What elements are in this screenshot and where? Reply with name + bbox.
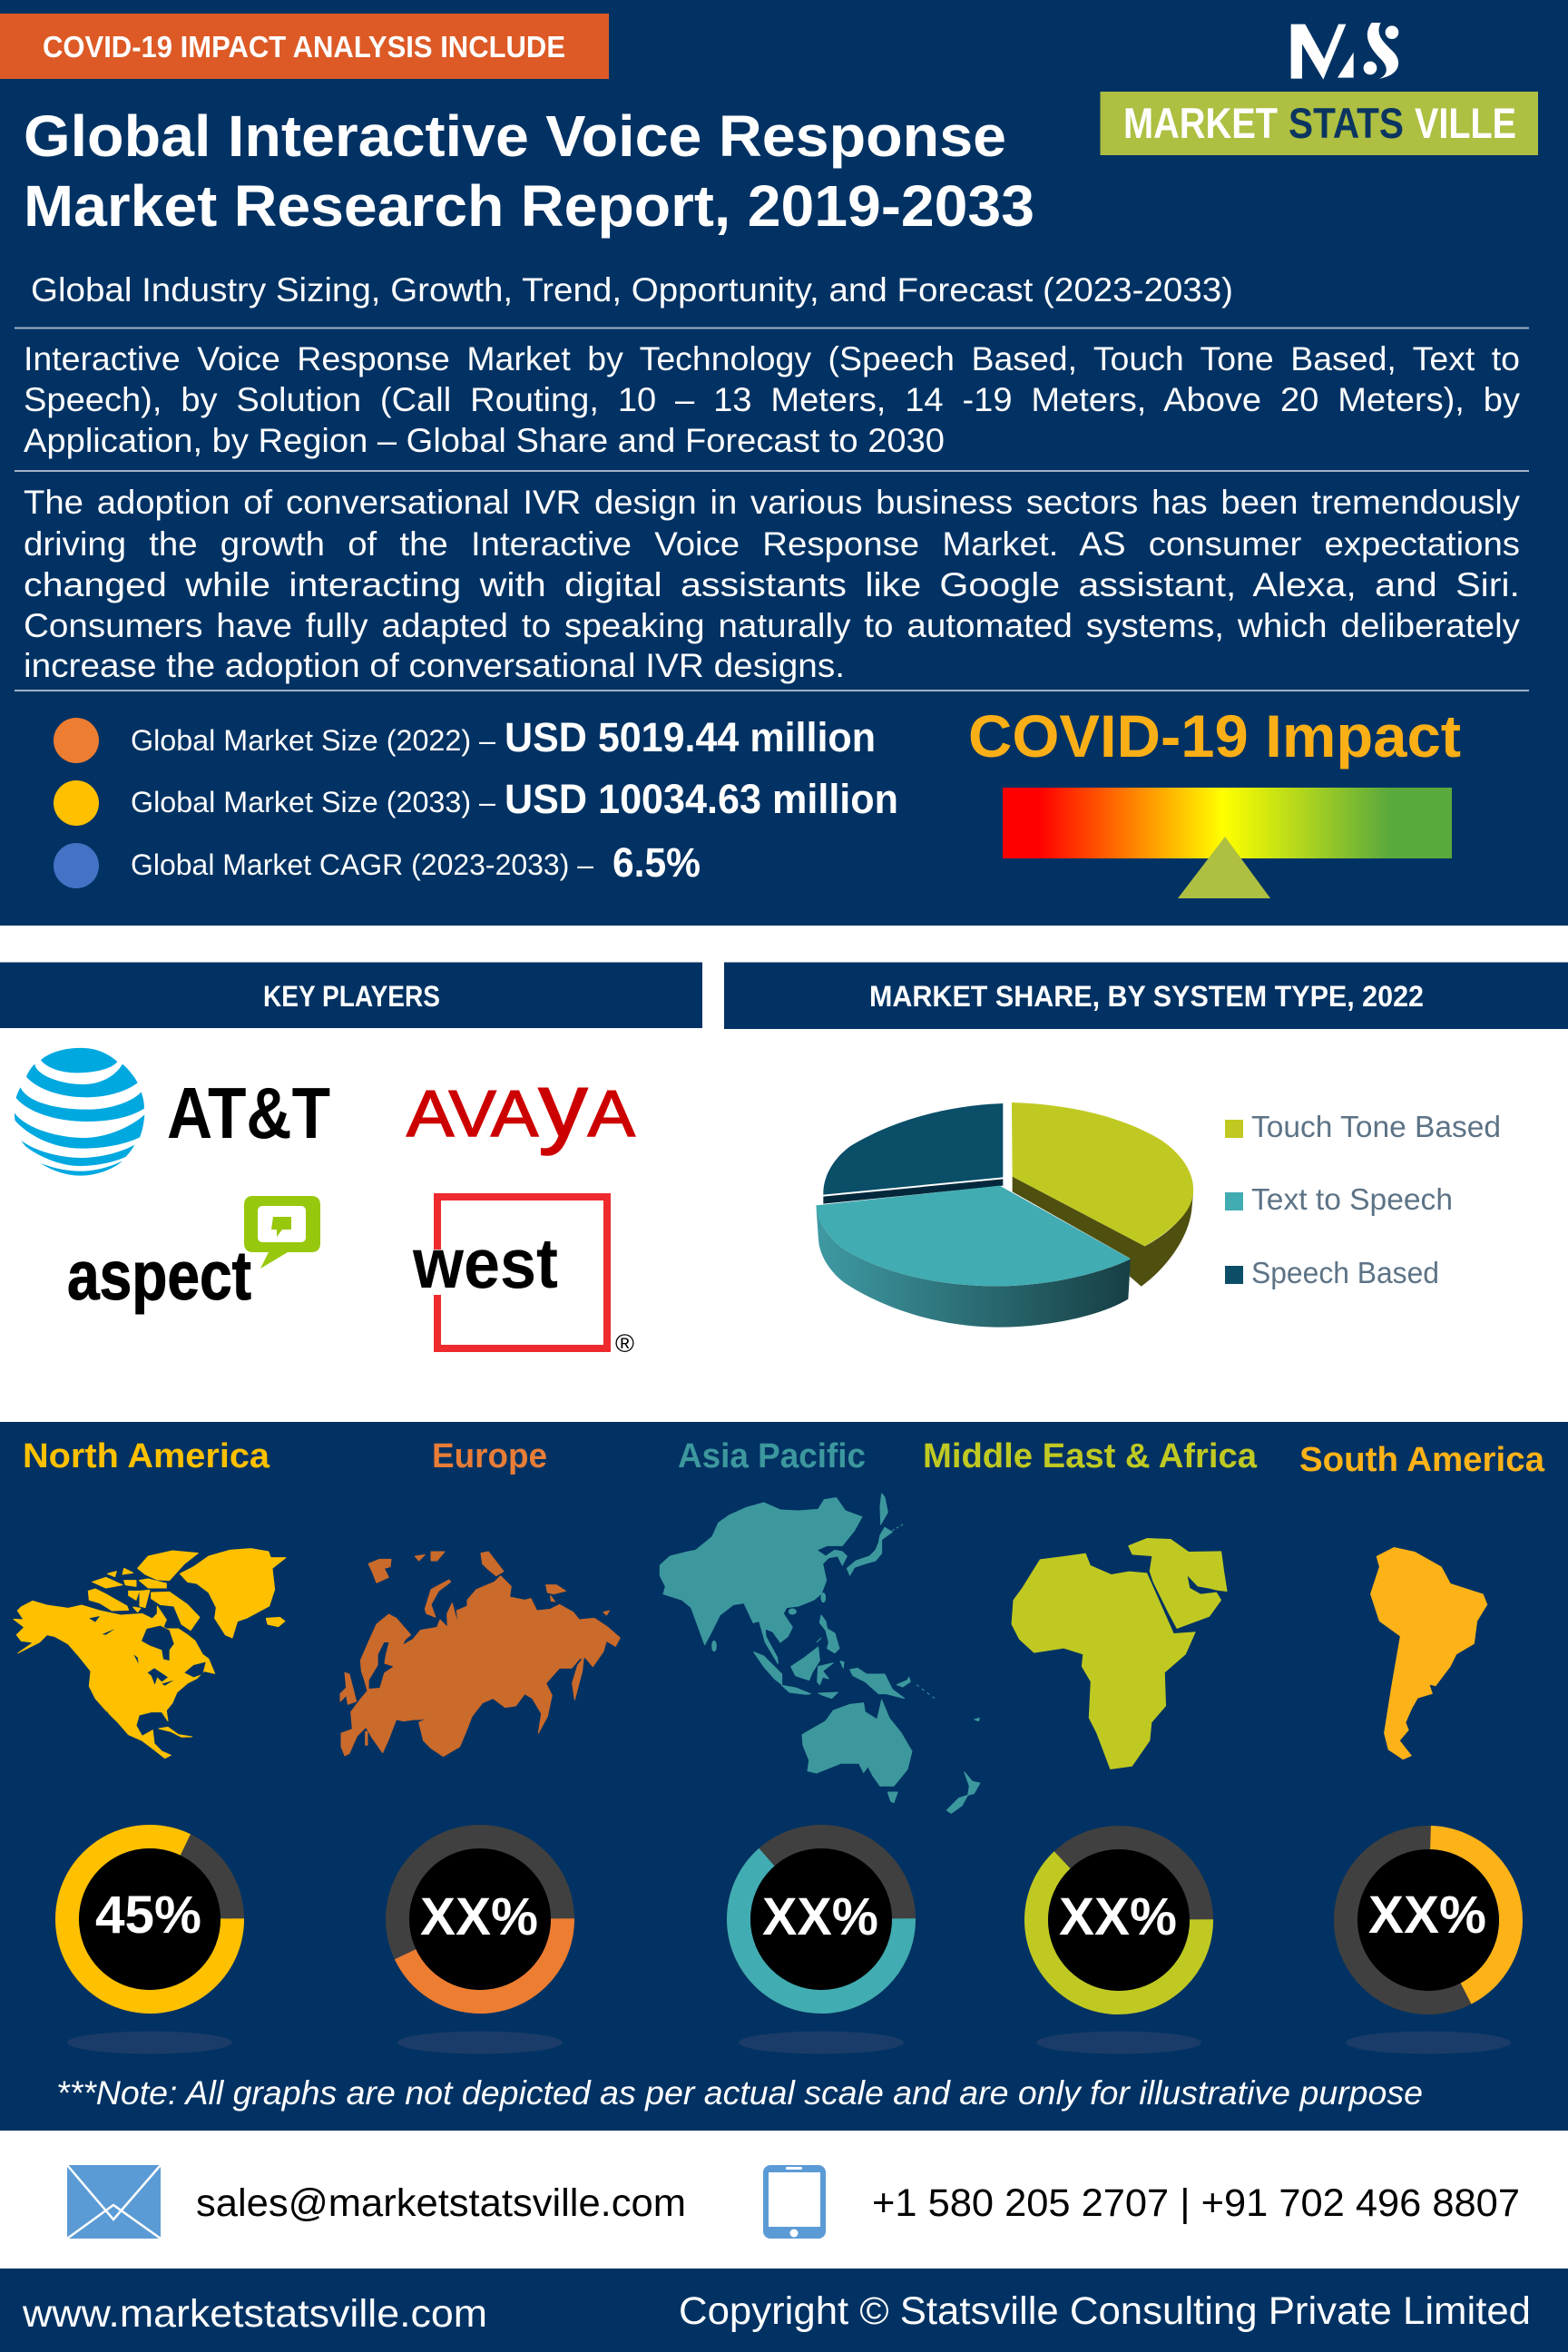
donut: europe bbox=[397, 1837, 563, 2054]
logo: market stats ville: MARKET bbox=[1123, 99, 1278, 147]
heading: covid-19 impact: COVID-19 Impact bbox=[968, 702, 1461, 769]
logo: aspect bbox=[67, 1196, 320, 1315]
panel: contact bbox=[67, 2165, 1520, 2239]
donut: north america 45%: 45% bbox=[95, 1886, 201, 1945]
phone numbers: +1 580 205 2707 | +91 702 496 8807 bbox=[872, 2181, 1520, 2225]
map: north america bbox=[14, 1549, 286, 1759]
logo: market stats ville bbox=[1100, 23, 1538, 155]
donut: south america: XX% bbox=[1368, 1886, 1486, 1945]
panel: header bbox=[0, 0, 1568, 926]
icon: mail bbox=[67, 2165, 161, 2239]
region label: south america: South America bbox=[1299, 1441, 1545, 1479]
website: www.marketstatsville.com bbox=[22, 2292, 487, 2336]
text block: market scope: Application, by Region – Global Share and Forecast to 2030 bbox=[24, 422, 945, 459]
panel: regions bbox=[0, 1422, 1568, 2131]
stat: market size 2033: USD 10034.63 million bbox=[505, 776, 898, 822]
text block: market description: driving the growth of the Interactive Voice Response Market. AS consumer expectations bbox=[24, 525, 1520, 563]
region label: asia pacific: Asia Pacific bbox=[678, 1437, 866, 1475]
region label: middle east & africa: Middle East & Africa bbox=[923, 1437, 1258, 1475]
text block: market description bbox=[24, 484, 1521, 684]
slice: text to speech bbox=[816, 1186, 1131, 1328]
stat: market size 2022 bbox=[54, 714, 876, 763]
heading: key players: KEY PLAYERS bbox=[263, 980, 440, 1013]
text block: market description: Consumers have fully adapted to speaking naturally to automated systems, which deliberately bbox=[24, 607, 1521, 644]
region label: europe: Europe bbox=[432, 1437, 547, 1475]
stat: cagr: Global Market CAGR (2023-2033) – bbox=[131, 848, 593, 881]
donut: europe: XX% bbox=[420, 1887, 538, 1946]
logo: at&t bbox=[15, 1048, 330, 1176]
logo: market stats ville: STATS bbox=[1289, 99, 1404, 147]
panel: footer bbox=[0, 2269, 1568, 2352]
text block: market scope: Interactive Voice Response Market by Technology (Speech Based, Touch Tone Based, Text to bbox=[24, 340, 1520, 377]
stat: market size 2033: Global Market Size (2033) – bbox=[131, 786, 495, 818]
text block: market scope: Speech), by Solution (Call Routing, 10 – 13 Meters, 14 -19 Meters, Above 20 Meters), by bbox=[24, 381, 1521, 418]
donut: asia pacific bbox=[739, 1837, 904, 2054]
banner: covid-19 impact: COVID-19 IMPACT ANALYSIS INCLUDE bbox=[43, 30, 565, 64]
title bbox=[24, 103, 1034, 239]
logo: west: west bbox=[412, 1223, 558, 1303]
donut: middle east & africa bbox=[1036, 1838, 1201, 2054]
note: ***Note: All graphs are not depicted as per actual scale and are only for illustrative purpose bbox=[56, 2074, 1423, 2112]
legend: Speech Based bbox=[1251, 1256, 1439, 1289]
heading: market share: MARKET SHARE, BY SYSTEM TYPE, 2022 bbox=[869, 980, 1424, 1013]
map: middle east & africa bbox=[1012, 1538, 1228, 1769]
legend: Text to Speech bbox=[1251, 1182, 1453, 1216]
region label: north america: North America bbox=[23, 1437, 270, 1475]
text block: market scope bbox=[24, 340, 1521, 459]
logo: aspect: aspect bbox=[67, 1238, 251, 1315]
heading: key players bbox=[0, 962, 702, 1028]
title: Market Research Report, 2019-2033 bbox=[24, 173, 1034, 239]
gauge: impact meter bbox=[1003, 788, 1452, 898]
panel: key players bbox=[0, 962, 702, 1357]
subtitle: Global Industry Sizing, Growth, Trend, Opportunity, and Forecast (2023-2033) bbox=[31, 271, 1233, 309]
banner: covid-19 impact bbox=[0, 14, 609, 79]
slice: touch tone based bbox=[1012, 1102, 1193, 1287]
icon: phone bbox=[763, 2165, 826, 2239]
stat: cagr bbox=[54, 839, 701, 888]
logo: west: ® bbox=[615, 1329, 634, 1357]
panel: market share bbox=[724, 962, 1568, 1328]
email: sales@marketstatsville.com bbox=[196, 2181, 686, 2225]
donut: asia pacific: XX% bbox=[762, 1887, 878, 1946]
logo: avaya: AVAyA bbox=[407, 1054, 635, 1156]
stat: market size 2022: USD 5019.44 million bbox=[505, 714, 876, 760]
text block: market description: changed while interacting with digital assistants like Google assistant, Alexa, and Siri. bbox=[24, 566, 1520, 603]
legend bbox=[1225, 1110, 1501, 1289]
donut: middle east & africa: XX% bbox=[1059, 1887, 1177, 1946]
stat: market size 2033 bbox=[54, 776, 898, 826]
copyright: Copyright © Statsville Consulting Private Limited bbox=[679, 2289, 1531, 2333]
heading: market share bbox=[724, 962, 1568, 1029]
logo: market stats ville: VILLE bbox=[1415, 99, 1516, 147]
text block: market description: increase the adoption of conversational IVR designs. bbox=[24, 647, 845, 684]
legend: Touch Tone Based bbox=[1251, 1110, 1501, 1143]
stat: cagr: 6.5% bbox=[612, 839, 701, 886]
title: Global Interactive Voice Response bbox=[24, 103, 1006, 169]
map: europe bbox=[340, 1552, 620, 1757]
map: asia pacific bbox=[660, 1494, 980, 1813]
stat: market size 2022: Global Market Size (2022) – bbox=[131, 724, 495, 757]
slice: speech based bbox=[823, 1103, 1003, 1204]
logo: at&t: AT&T bbox=[167, 1073, 330, 1153]
pie chart bbox=[816, 1102, 1193, 1328]
donut: south america bbox=[1343, 1835, 1514, 2054]
logo: west bbox=[412, 1197, 634, 1357]
text block: market description: The adoption of conversational IVR design in various business sectors has been tremendously bbox=[24, 484, 1521, 521]
map: south america bbox=[1370, 1547, 1487, 1759]
donut: north america 45% bbox=[67, 1837, 232, 2054]
